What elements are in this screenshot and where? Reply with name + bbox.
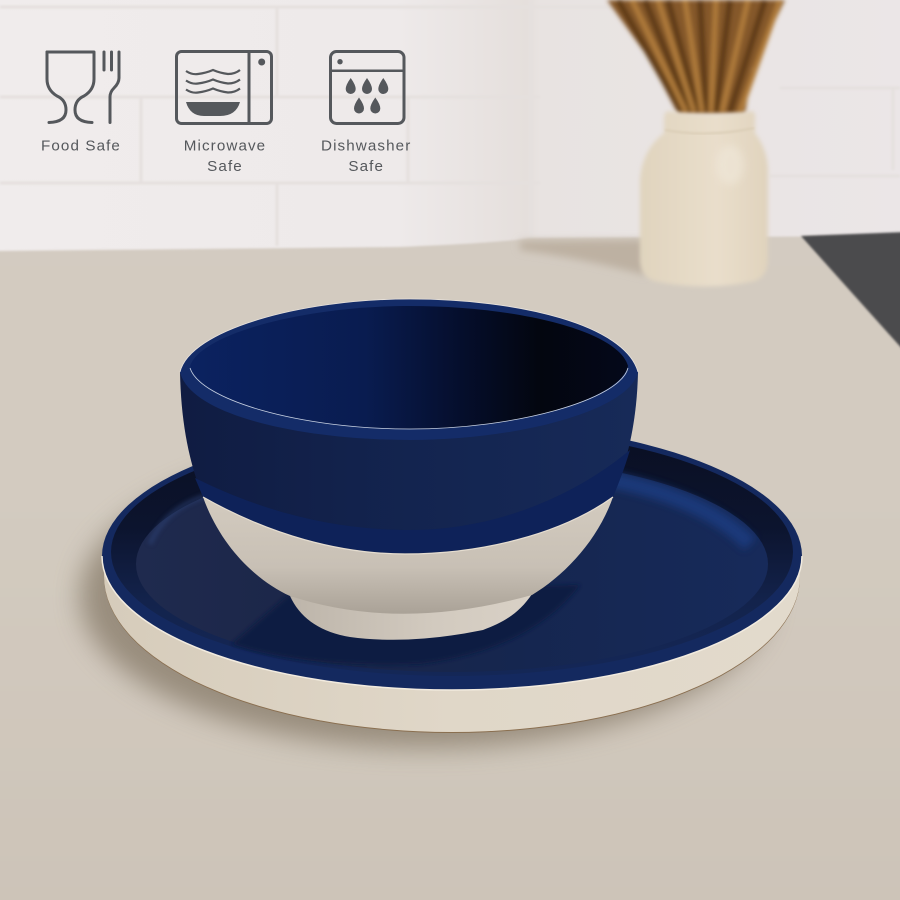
- plate clay underside: [104, 421, 800, 733]
- icon: microwave safe: [176, 52, 272, 124]
- bowl dark band: [195, 450, 630, 553]
- plate shadow: [80, 444, 770, 748]
- plate navy rim: [102, 422, 802, 690]
- wall background: [0, 0, 900, 262]
- vase with dried stems: [607, 0, 785, 286]
- bowl stripe line: [203, 497, 613, 554]
- plate floor: [136, 456, 768, 672]
- label: dishwasher safe: Safe: [348, 158, 384, 175]
- icon: dishwasher safe: [330, 52, 404, 124]
- bowl interior: [190, 306, 628, 429]
- label: microwave safe: Safe: [207, 158, 243, 175]
- bowl rim: [180, 299, 638, 440]
- floor highlight right: [590, 476, 750, 544]
- dark tray: [801, 232, 900, 352]
- plate rim highlight: [102, 556, 802, 690]
- counter corner shadow: [520, 240, 645, 275]
- plate inner wall: [111, 428, 793, 676]
- bowl: [180, 299, 638, 640]
- icon group: [41, 52, 411, 175]
- bowl foot: [290, 594, 532, 640]
- label: dishwasher safe: Dishwasher: [321, 138, 411, 154]
- bowl shadow on plate: [232, 585, 580, 665]
- label: food safe: Food Safe: [41, 138, 121, 154]
- bowl clay base: [203, 497, 613, 614]
- label: microwave safe: Microwave: [184, 138, 266, 154]
- rim highlight upper: [180, 299, 638, 372]
- floor highlight left: [150, 496, 205, 544]
- countertop: [0, 236, 900, 900]
- rim highlight lower: [190, 368, 628, 429]
- bowl navy body: [180, 372, 638, 554]
- plate: [102, 420, 802, 733]
- icon: food safe: [47, 52, 119, 122]
